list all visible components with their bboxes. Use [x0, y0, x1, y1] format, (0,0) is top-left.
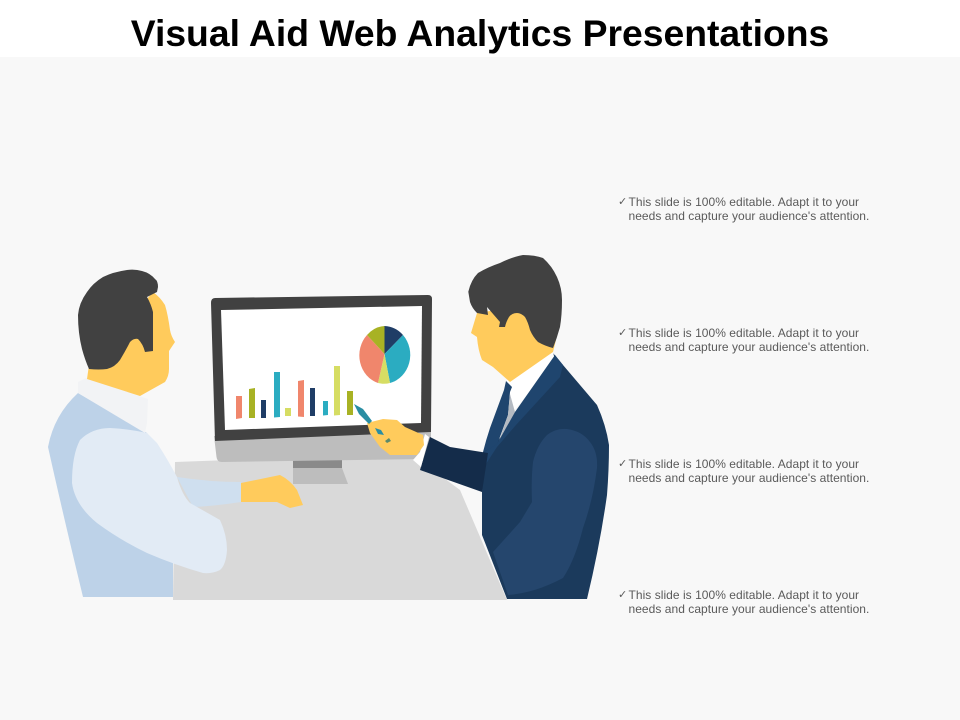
left man: neck and face	[87, 292, 175, 396]
text block 3	[618, 457, 869, 485]
right man: hand	[367, 419, 424, 455]
text block 3: needs and capture your audience's attention.	[628, 471, 869, 485]
man on the left	[48, 270, 303, 597]
monitor chin	[214, 428, 431, 462]
text block 1: needs and capture your audience's attention.	[628, 209, 869, 223]
right man: tie	[483, 381, 512, 452]
text block 2: This slide is 100% editable. Adapt it to your	[628, 326, 859, 340]
left man: vest	[48, 393, 173, 597]
man on the right	[354, 255, 609, 599]
left man: hair	[78, 270, 158, 370]
right man: arm	[420, 437, 488, 492]
text block 2: ✓	[618, 327, 627, 339]
text block 1: ✓	[618, 196, 627, 208]
text block 2: needs and capture your audience's attention.	[628, 340, 869, 354]
text block 4: needs and capture your audience's attention.	[628, 602, 869, 616]
right man: tie shadow	[498, 394, 515, 444]
monitor stand	[293, 460, 348, 484]
desk	[173, 458, 507, 600]
bar chart	[236, 366, 353, 419]
monitor	[211, 295, 432, 484]
text block 1: This slide is 100% editable. Adapt it to your	[628, 195, 859, 209]
title: Visual Aid Web Analytics Presentations	[131, 12, 829, 54]
left man: sleeve	[72, 428, 227, 573]
left man: collar	[78, 378, 148, 433]
text block 3: This slide is 100% editable. Adapt it to your	[628, 457, 859, 471]
text block 4: This slide is 100% editable. Adapt it to your	[628, 588, 859, 602]
monitor screen	[221, 306, 422, 430]
left man: forearm	[177, 477, 241, 507]
right man: neck and face	[471, 305, 556, 382]
right man: sleeve	[493, 429, 597, 595]
text block 4: ✓	[618, 589, 627, 601]
right man: pen	[354, 404, 391, 443]
text block 3: ✓	[618, 458, 627, 470]
right man: jacket	[482, 353, 609, 599]
text block 2	[618, 326, 869, 354]
text block 1	[618, 195, 869, 223]
right man: cuff	[413, 434, 429, 467]
text block 4	[618, 588, 869, 616]
right man: hair	[468, 255, 562, 348]
pie chart	[359, 326, 410, 384]
left man: hand	[241, 475, 303, 508]
right man: shirt	[507, 352, 555, 412]
monitor bezel	[211, 295, 432, 441]
right man: lapel	[482, 355, 563, 470]
